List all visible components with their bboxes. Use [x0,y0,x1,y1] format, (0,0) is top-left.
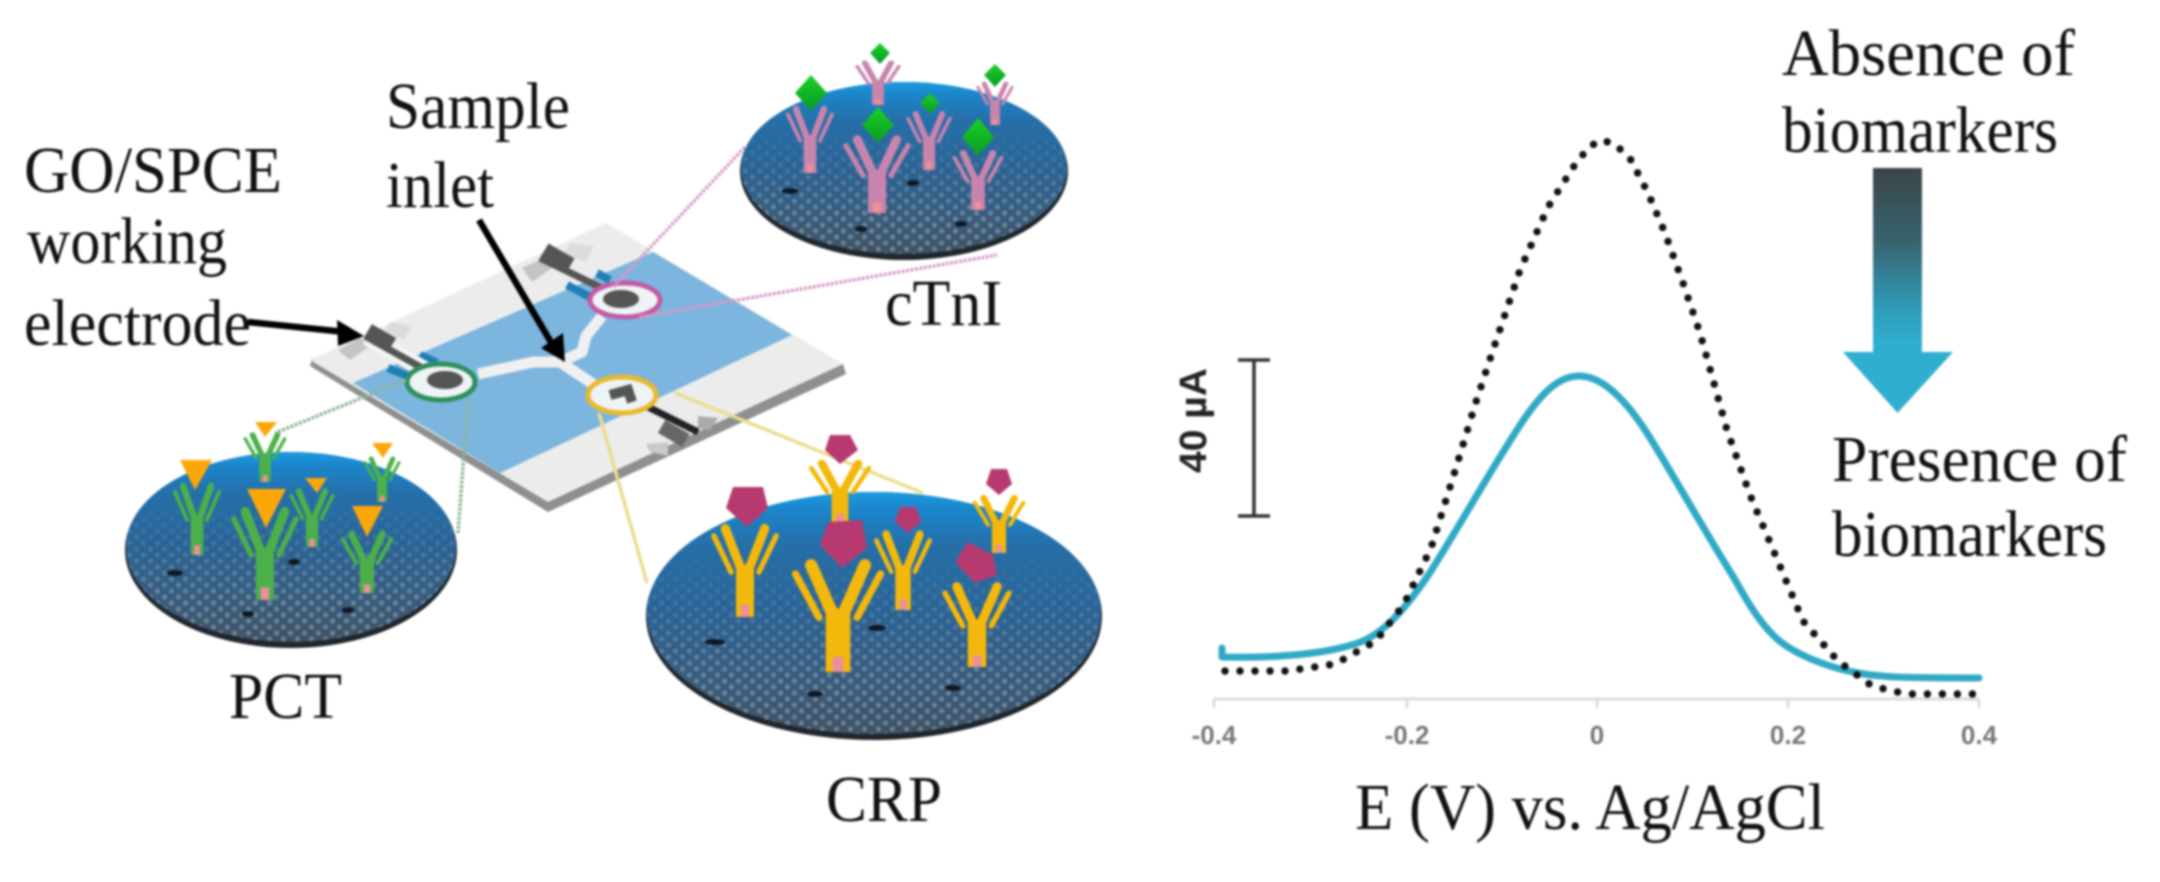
label: CRP: CRP [826,763,942,836]
text: presence of biomarkers: Presence of [1832,423,2127,496]
scale bar [1173,360,1270,516]
antibodies [714,463,1023,672]
voltammogram chart [1192,140,1998,750]
electrode PCT leads [338,322,443,380]
text: GO/SPCE working electrode [24,134,282,360]
text: absence of biomarkers [1782,17,2075,167]
x axis [1214,699,1979,708]
tick labels [1192,720,1998,750]
tick labels: -0.4 [1192,720,1237,750]
microfluidic chip [310,223,846,512]
electrode CRP leads [630,398,718,456]
gradient down arrow [1843,168,1953,413]
label: cTnI: cTnI [885,267,1002,340]
cTnI antigens [795,43,1006,156]
connector lines [275,147,997,583]
ring: CRP working electrode [588,377,656,413]
curve: presence of biomarkers [1222,376,1979,678]
graphene surface [646,492,1102,740]
text: absence of biomarkers: Absence of [1782,17,2075,90]
graphene surface [125,452,457,648]
text: GO/SPCE working electrode: electrode [24,287,251,360]
text: Sample inlet: inlet [386,149,494,222]
chip side edge [310,358,846,512]
tick labels: 0 [1590,720,1604,750]
text: Sample inlet [386,70,570,222]
tick labels: 0.4 [1961,720,1998,750]
ring: cTnI working electrode [590,283,660,317]
surface defects [167,559,354,617]
blue paper region [353,252,792,473]
CRP antigens [726,435,1012,583]
disc: cTnI [740,43,1068,260]
ring: PCT working electrode [407,364,475,400]
arrow: to working electrode [248,320,364,346]
surface defects [782,180,967,232]
tick labels: 0.2 [1770,720,1806,750]
white microchannels [478,316,602,386]
tick labels: -0.2 [1385,720,1429,750]
curve: absence of biomarkers [1225,140,1979,694]
PCT antigens [180,422,393,537]
text: presence of biomarkers: biomarkers [1832,498,2107,571]
text: presence of biomarkers [1832,423,2127,571]
graphene surface [740,82,1068,260]
surface defects [705,625,961,697]
text: Sample inlet: Sample [386,70,570,143]
antibodies [788,63,1012,213]
chip body [310,223,843,502]
antibodies [175,435,399,600]
scale bar label: 40 µA [1173,368,1215,473]
electrode cTnI leads [522,243,622,298]
x axis title: E (V) vs. Ag/AgCl [1355,771,1825,844]
text: GO/SPCE working electrode: GO/SPCE [24,134,282,207]
text: absence of biomarkers: biomarkers [1782,94,2058,167]
disc: PCT [125,422,457,648]
arrow: to sample inlet [479,220,565,362]
disc: CRP [646,435,1102,740]
label: PCT: PCT [229,660,342,733]
text: GO/SPCE working electrode: working [27,205,227,278]
